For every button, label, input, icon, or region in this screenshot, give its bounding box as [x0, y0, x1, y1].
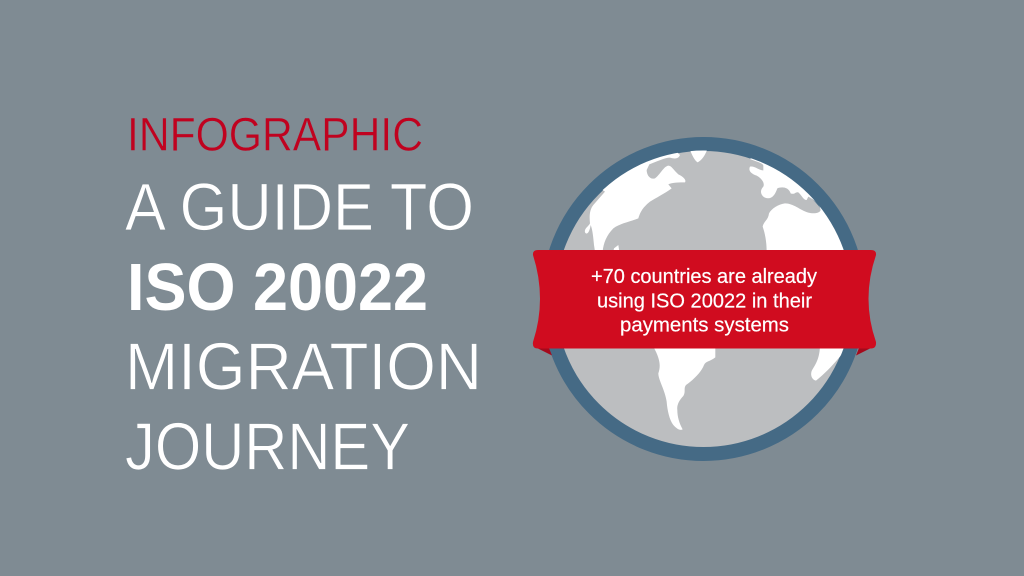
heading line: ISO 20022: ISO 20022	[127, 250, 428, 325]
North America	[585, 145, 685, 252]
heading line: JOURNEY: JOURNEY	[125, 409, 410, 484]
eyebrow: INFOGRAPHIC: INFOGRAPHIC	[127, 108, 423, 161]
continents	[585, 145, 853, 430]
globe ring	[548, 144, 858, 454]
ribbon text: using ISO 20022 in their	[597, 290, 812, 313]
Europe, Asia and Africa	[749, 158, 844, 250]
globe	[548, 144, 858, 454]
heading line: MIGRATION: MIGRATION	[125, 329, 482, 404]
ribbon text: payments systems	[620, 314, 789, 337]
ribbon body	[533, 250, 876, 348]
heading line: A GUIDE TO: A GUIDE TO	[125, 170, 474, 245]
title block	[125, 108, 482, 484]
ribbon folds	[537, 348, 871, 356]
Africa southern tip	[811, 348, 844, 380]
Greenland	[690, 150, 707, 162]
ribbon text	[591, 265, 818, 337]
ribbon banner	[533, 250, 876, 356]
ribbon text: +70 countries are already	[591, 265, 818, 288]
Central America	[614, 245, 619, 250]
South America	[653, 347, 715, 430]
